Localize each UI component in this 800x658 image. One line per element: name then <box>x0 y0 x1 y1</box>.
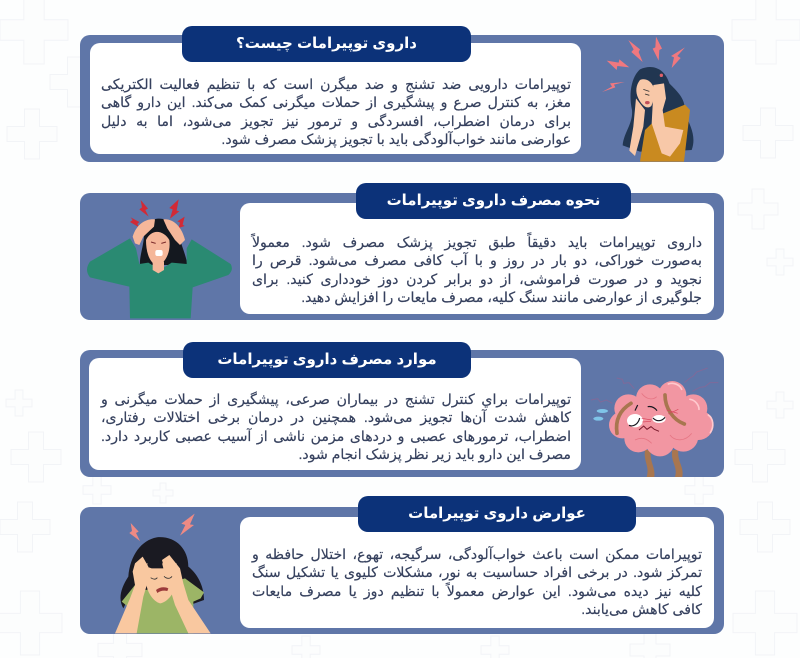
paragraph: مصرف این دارو باید زیر نظر پزشک انجام شود. <box>298 446 571 462</box>
heading <box>183 342 471 378</box>
panel: what is topiramate <box>80 35 724 162</box>
paragraph: تمرکز شود. در برخی افراد حساسیت به نور، مشکلات کلیوی یا تشکیل سنگ <box>252 564 702 580</box>
paragraph: توپیرامات دارویی ضد تشنج و ضد میگرن است که با تنظیم فعالیت الکتریکی <box>101 76 571 92</box>
paragraph <box>251 546 702 618</box>
paragraph: عوارضی مانند خواب‌آلودگی باید با تجویز پزشک مصرف شود. <box>221 131 571 147</box>
paragraph: توپیرامات ممکن است باعث خواب‌آلودگی، سرگیجه، تهوع، اختلال حافظه و <box>252 546 702 562</box>
heading <box>356 183 631 219</box>
heading <box>182 26 471 62</box>
paragraph <box>100 391 572 463</box>
paragraph: کاهش شدت آن‌ها تجویز می‌شود. همچنین در درمان برخی اختلالات رفتاری، <box>101 409 571 425</box>
white text card <box>240 203 714 314</box>
illustration: woman in green shirt with eyes closed <box>115 514 211 634</box>
heading: نحوه مصرف داروی توپیرامات <box>387 192 600 209</box>
paragraph: جلوگیری از عوارضی مانند سنگ کلیه، مصرف مایعات را افزایش دهید. <box>301 289 702 305</box>
panel: side effects of topiramate <box>80 507 724 634</box>
heading: داروی توپیرامات چیست؟ <box>236 35 417 52</box>
illustration: woman in green sweater holding head <box>87 200 232 318</box>
paragraph: توپیرامات براي كنترل تشنج در بیماران صرعی، پیشگیری از حملات میگرنی و <box>101 391 571 407</box>
paragraph <box>101 76 571 148</box>
paragraph <box>250 232 702 306</box>
heading: عوارض داروی توپیرامات <box>408 505 586 522</box>
paragraph: برای درمان اضطراب، افسردگی و ترمور نیز تجویز می‌شود، اما به دلیل <box>101 113 571 129</box>
heading: موارد مصرف داروی توپیرامات <box>217 351 437 368</box>
white text card <box>90 43 581 154</box>
paragraph: مغز، به کنترل صرع و پیشگیری از حملات میگرنی کمک می‌کند. این دارو گاهی <box>101 94 571 110</box>
paragraph: کلیه نیز دیده می‌شود. این عوارض معمولاً با تنظیم دوز یا مصرف مایعات <box>252 583 702 599</box>
paragraph: داروی توپیرامات باید دقیقاً طبق تجویز پزشک مصرف شود. معمولاً <box>252 234 702 250</box>
paragraph: به‌صورت خوراکی، دو بار در روز و با آب کافی مصرف می‌شود. قرص را <box>252 252 702 268</box>
panel: how to use topiramate <box>80 193 724 320</box>
paragraph: کافی کاهش می‌یابند. <box>581 601 702 617</box>
heading <box>358 496 636 532</box>
illustration: sad pink brain character <box>591 368 718 477</box>
paragraph: اضطراب، ترمورهای عصبی و دردهای مزمن ناشی از آسیب عصبی کاربرد دارد. <box>101 428 571 444</box>
white text card <box>240 517 714 628</box>
illustration: woman with headache and lightning bolts <box>602 36 694 162</box>
paragraph: نجوید و در صورت فراموشی، از دو برابر کردن دوز خودداری کنید. برای <box>252 271 702 287</box>
white text card <box>89 358 581 470</box>
panel: uses of topiramate <box>80 350 724 477</box>
